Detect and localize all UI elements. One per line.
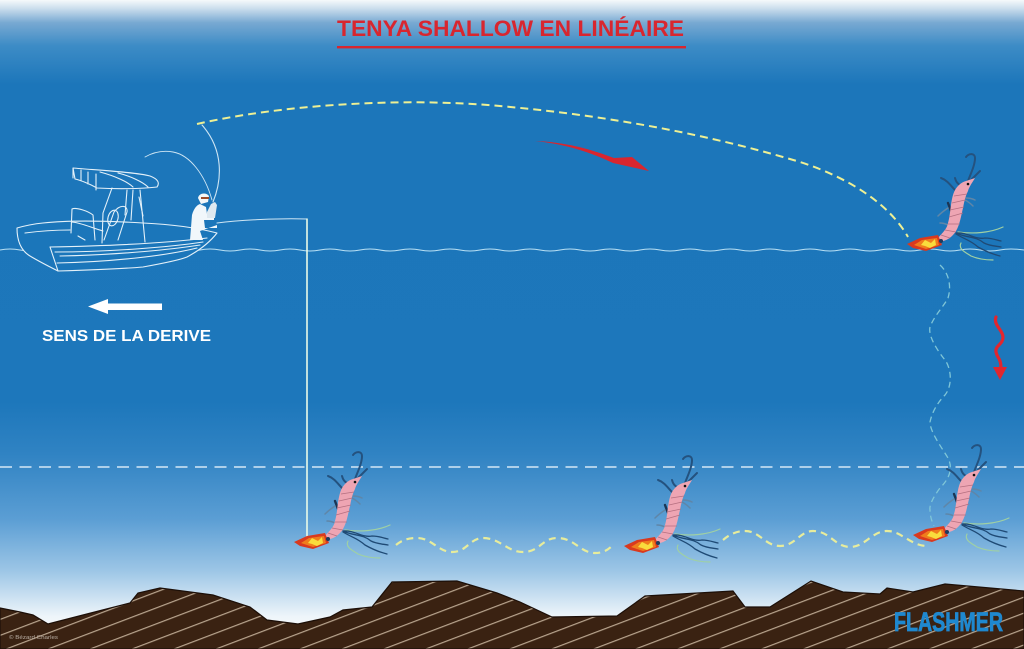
seabed: [0, 581, 1024, 649]
shrimp lure at surface: [907, 154, 1003, 260]
red cast arrow: [535, 141, 649, 171]
drift direction arrow: [88, 299, 162, 314]
linear retrieve path, right: [723, 531, 928, 547]
fishing boat: [17, 168, 217, 271]
fishing rods and lines: [145, 125, 307, 538]
title: TENYA SHALLOW EN LINÉAIRE: [337, 16, 684, 41]
sinking path: [930, 265, 950, 526]
shrimp lure at bottom, middle: [624, 456, 720, 562]
copyright: © Bézard Charles: [9, 634, 58, 641]
shrimp lure at bottom, under boat: [294, 452, 390, 558]
depth dashed line: [0, 466, 1024, 468]
water surface line: [0, 249, 1024, 251]
casting arc: [197, 102, 908, 237]
shrimp lure at bottom, right: [913, 445, 1009, 551]
drift label: SENS DE LA DERIVE: [42, 328, 211, 345]
red wavy sinking arrow: [993, 317, 1007, 380]
angler: [190, 194, 217, 240]
linear retrieve path, left: [396, 538, 613, 553]
